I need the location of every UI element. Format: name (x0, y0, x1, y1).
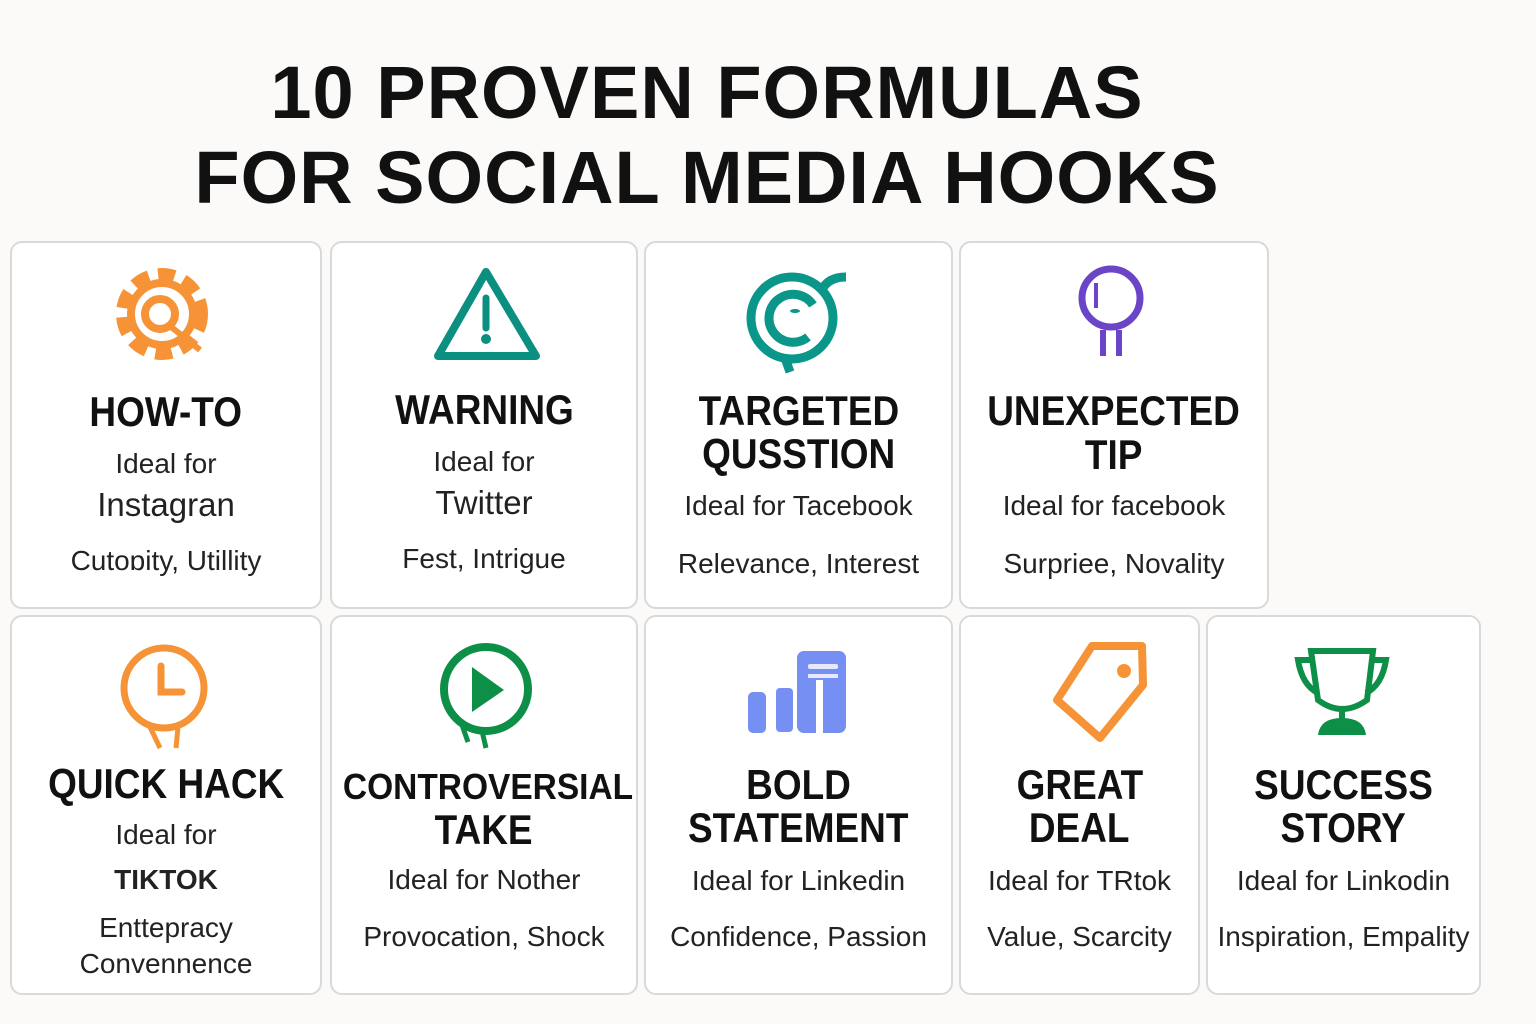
heading: great deal (1016, 761, 1143, 851)
heading: warning: WARNING (395, 386, 573, 433)
heading: controversial take (343, 766, 633, 853)
heading: unexpected tip: UNEXPECTED (988, 387, 1240, 434)
text: quick hack details: Ideal for (115, 819, 217, 850)
text: warning details: Twitter (435, 484, 533, 521)
panel: warning (330, 241, 638, 609)
text: warning details (402, 446, 566, 574)
text: warning details: Ideal for (433, 446, 535, 477)
heading: success story: SUCCESS (1254, 761, 1433, 808)
icon: clock (124, 648, 204, 748)
text: quick hack details: TIKTOK (114, 864, 218, 895)
icon: play button (444, 647, 528, 748)
title: FOR SOCIAL MEDIA HOOKS (194, 136, 1220, 219)
icon: trophy (1298, 651, 1386, 735)
icon: bar chart (748, 651, 846, 734)
heading: how-to: HOW-TO (90, 388, 242, 435)
text: bold details: Confidence, Passion (670, 921, 927, 952)
heading: targeted question (698, 387, 899, 477)
title: 10 PROVEN FORMULAS (270, 51, 1144, 134)
text: tip details: Surpriee, Novality (1004, 548, 1224, 579)
text: bold details (670, 865, 927, 952)
text: warning details: Fest, Intrigue (402, 543, 566, 574)
icon: price tag (1057, 646, 1143, 738)
text: how-to details: Cutoɒity, Utillity (71, 545, 261, 576)
heading: targeted question: QUSSTION (702, 430, 895, 477)
panel: quick hack (10, 615, 322, 995)
heading: unexpected tip (988, 387, 1240, 478)
heading: quick hack: QUICK HACK (48, 760, 284, 807)
text: success details: Inspiration, Empality (1217, 921, 1470, 952)
text: controversial details: Ideal for Nother (388, 864, 580, 895)
panel: controversial take (330, 615, 638, 995)
heading: controversial take: CONTROVERSIAL (343, 766, 633, 807)
text: deal details: Value, Scarcity (987, 921, 1172, 952)
text: deal details: Ideal for TRtok (988, 865, 1171, 896)
text: controversial details (363, 864, 605, 952)
panel: success story (1206, 615, 1481, 995)
heading: great deal: GREAT (1016, 761, 1143, 808)
text: targeted details: Relevance, Interest (678, 548, 919, 579)
icon: gear with magnifier (124, 276, 200, 352)
panel: targeted question (644, 241, 953, 609)
text: tip details (1003, 490, 1226, 579)
text: deal details (987, 865, 1172, 952)
heading: success story: STORY (1281, 804, 1406, 851)
icon: lightbulb (1082, 269, 1140, 356)
text: success details: Ideal for Linkodin (1237, 865, 1450, 896)
text: how-to details: Instagran (97, 486, 235, 523)
text: success details (1217, 865, 1470, 952)
text: targeted details: Ideal for Tacebook (684, 490, 913, 521)
text: controversial details: Provocation, Shock (363, 921, 605, 952)
text: how-to details: Ideal for (115, 448, 217, 479)
text: quick hack details (80, 819, 252, 979)
text: how-to details (71, 448, 262, 576)
heading: unexpected tip: TIP (1085, 431, 1143, 478)
heading: bold statement: STATEMENT (688, 804, 909, 851)
panel: how-to (10, 241, 322, 609)
text: bold details: Ideal for Linkedin (692, 865, 905, 896)
icon: warning triangle (438, 272, 536, 356)
panel: great deal (959, 615, 1200, 995)
title (194, 51, 1220, 219)
text: tip details: Ideal for facebook (1003, 490, 1225, 521)
heading: great deal: DEAL (1029, 804, 1130, 851)
heading: bold statement (688, 761, 909, 851)
panel: bold statement (644, 615, 953, 995)
text: targeted details (678, 490, 919, 579)
text: quick hack details: Convennence (80, 948, 252, 979)
heading: controversial take: TAKE (435, 806, 533, 853)
heading: targeted question: TARGETED (698, 387, 899, 434)
text: quick hack details: Enttepracy (99, 912, 233, 943)
panel: unexpected tip (959, 241, 1269, 609)
heading: success story (1254, 761, 1433, 851)
icon: target speech (751, 277, 846, 372)
heading: bold statement: BOLD (746, 761, 851, 808)
